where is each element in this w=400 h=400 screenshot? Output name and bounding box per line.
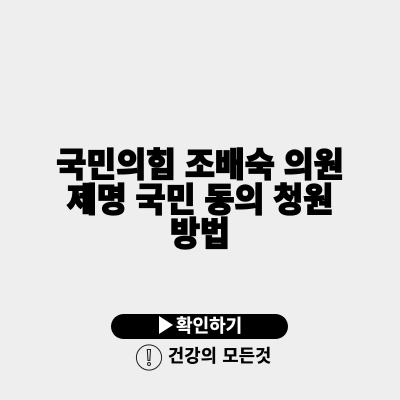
icon: exclamation circle	[136, 344, 162, 371]
title	[56, 146, 344, 253]
title: 방법	[170, 215, 230, 253]
icon: play triangle	[159, 316, 173, 334]
title: 국민의힘 조배숙 의원	[56, 146, 344, 184]
button: confirm	[111, 314, 288, 339]
title: 제명 국민 동의 청원	[67, 181, 333, 219]
brand caption: 건강의 모든것	[168, 346, 272, 366]
button label: 확인하기	[176, 316, 242, 336]
